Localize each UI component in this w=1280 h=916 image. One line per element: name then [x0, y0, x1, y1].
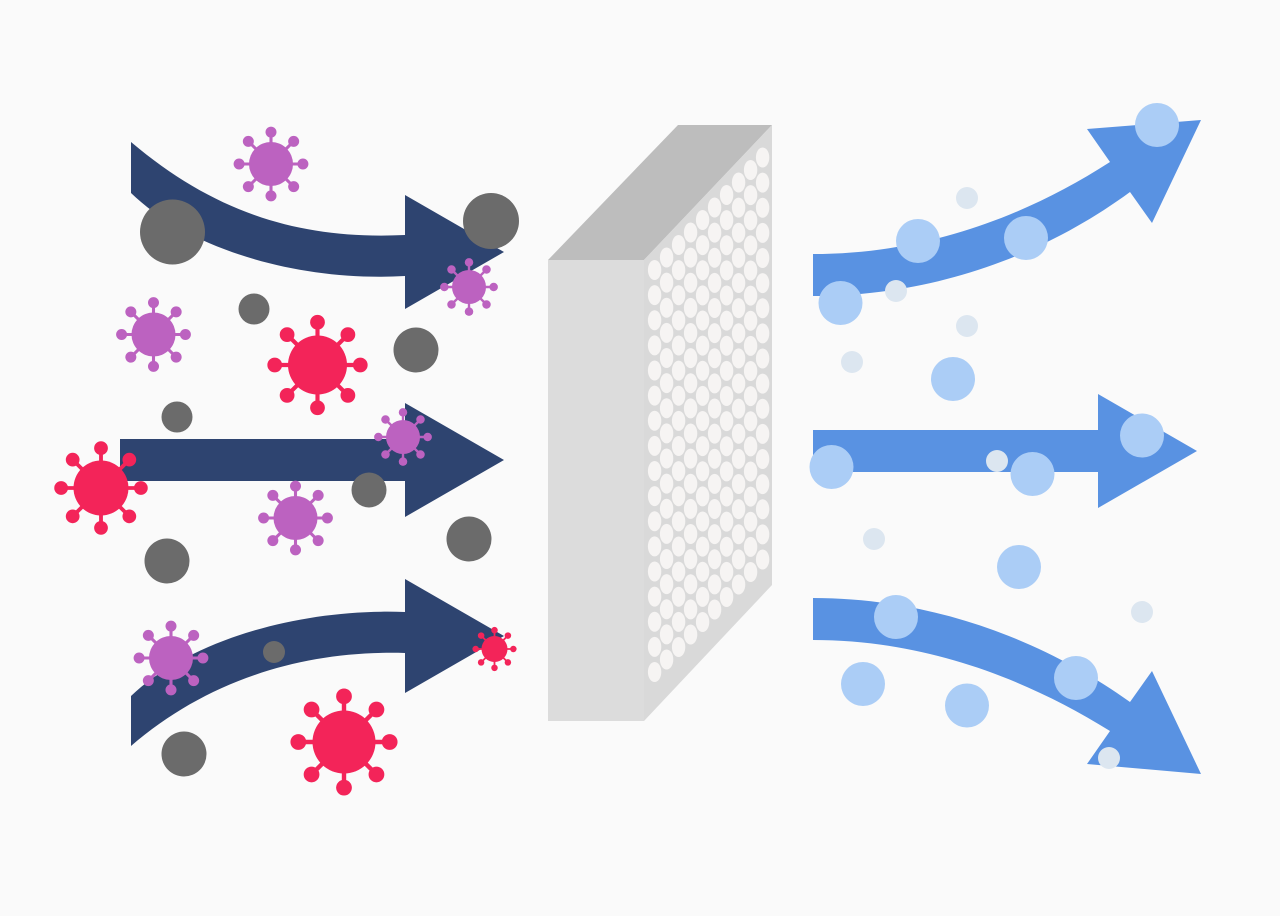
purple viruses	[116, 127, 498, 695]
clean air bubbles large	[810, 103, 1179, 728]
arrow: clean air bottom	[813, 598, 1201, 774]
filter holes	[648, 148, 769, 682]
arrow: incoming air bottom	[131, 579, 504, 746]
arrow: clean air middle	[813, 394, 1197, 508]
soot particles	[140, 193, 519, 776]
arrow: clean air top	[813, 120, 1201, 296]
red viruses	[54, 315, 517, 796]
filter top	[548, 125, 772, 260]
arrow: incoming air middle	[120, 403, 504, 517]
filter mesh face	[644, 125, 772, 721]
clean air bubbles small	[841, 187, 1153, 769]
arrow: incoming air top	[131, 142, 504, 309]
filter front side	[548, 260, 644, 721]
filter block	[548, 125, 772, 721]
